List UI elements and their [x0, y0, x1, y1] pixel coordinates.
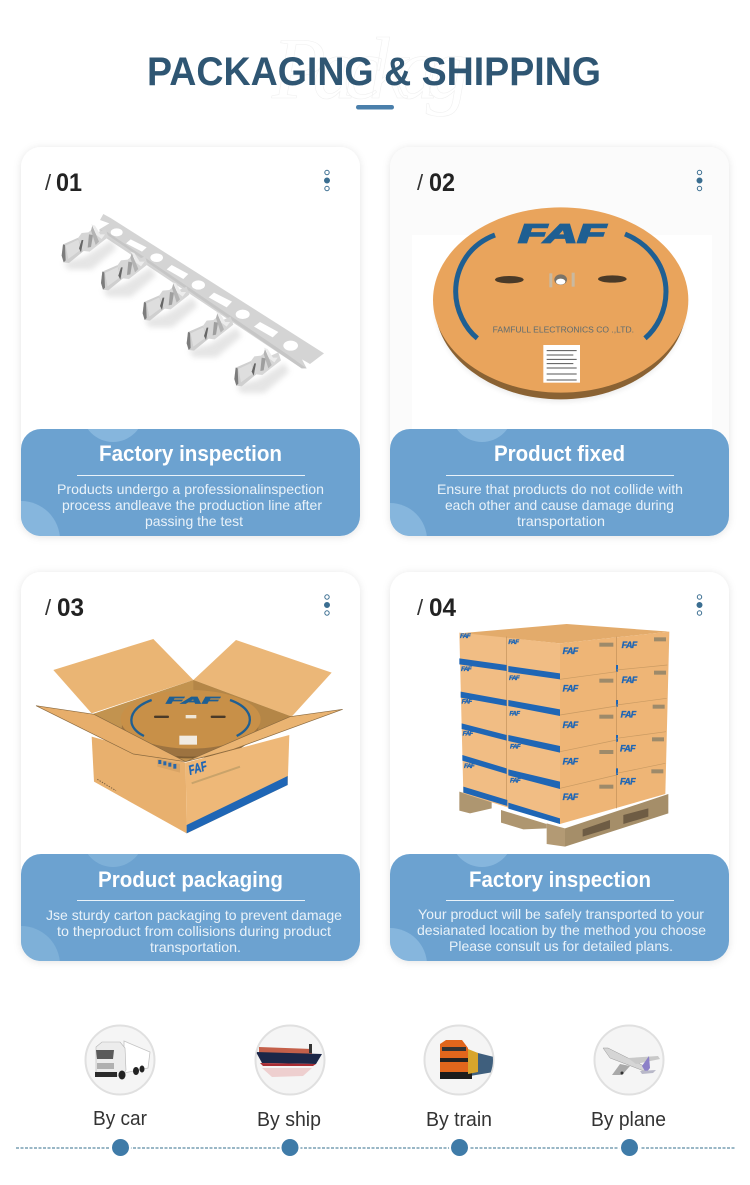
panel: card 02 product fixed — [388, 146, 731, 539]
carton logos: FAF — [563, 646, 579, 656]
caption heading: Factory inspection — [469, 867, 651, 892]
caption text — [417, 906, 706, 954]
menu dots — [324, 595, 330, 615]
icon: ship — [256, 1026, 324, 1094]
panel: card 04 delivery — [388, 571, 731, 964]
label: by plane: By plane — [591, 1109, 666, 1131]
reel logo: FAF — [518, 218, 608, 248]
title underline — [356, 105, 394, 110]
caption panel 02 — [390, 429, 729, 536]
label: by train: By train — [426, 1109, 492, 1131]
carton logos: FAF — [620, 743, 636, 753]
caption text — [57, 481, 324, 529]
carton logos: FAF — [461, 666, 472, 673]
reel company name: FAMFULL ELECTRONICS CO .,LTD. — [493, 326, 634, 335]
caption text: Jse sturdy carton packaging to prevent damage — [46, 907, 342, 923]
script watermark: Packag — [271, 21, 470, 118]
transport methods — [16, 1026, 735, 1157]
caption text: each other and cause damage during — [445, 497, 674, 513]
step number 04 — [417, 594, 456, 622]
carton logos: FAF — [464, 763, 475, 770]
carton logos: FAF — [622, 640, 638, 650]
step number 03: / — [45, 595, 52, 620]
carton logos: FAF — [509, 675, 520, 682]
caption text: Please consult us for detailed plans. — [449, 938, 673, 954]
caption text: transportation — [517, 513, 605, 529]
inner reel logo: FAF — [166, 696, 220, 706]
carton logos: FAF — [510, 744, 521, 751]
carton logos — [460, 633, 638, 802]
carton logos: FAF — [463, 730, 473, 737]
carton logo: FAF — [187, 758, 209, 778]
wooden pallet — [459, 792, 668, 847]
caption panel 03 — [21, 854, 360, 961]
caption heading: Product fixed — [494, 441, 625, 466]
caption text: Products undergo a professionalinspection — [57, 481, 324, 497]
carton logos: FAF — [563, 720, 579, 730]
label: by car: By car — [93, 1108, 147, 1130]
panel: card 01 factory inspection — [19, 146, 362, 539]
header — [147, 21, 601, 118]
caption text: desianated location by the method you choose — [417, 922, 706, 938]
caption text: passing the test — [145, 513, 243, 529]
icon: plane — [594, 1026, 664, 1094]
caption text — [437, 481, 683, 529]
carton logos: FAF — [460, 633, 471, 640]
caption heading: Product packaging — [98, 867, 283, 892]
label: by ship: By ship — [257, 1109, 321, 1131]
carton logos: FAF — [508, 639, 519, 646]
carton logos: FAF — [621, 709, 637, 719]
timeline — [16, 1138, 735, 1157]
caption text: Your product will be safely transported to your — [418, 906, 704, 922]
menu dots — [697, 595, 702, 615]
step number 04: 04 — [429, 594, 456, 622]
step number 03 — [45, 594, 84, 622]
carton logos: FAF — [622, 675, 638, 685]
menu dots — [697, 170, 702, 191]
image: palletised cartons — [459, 624, 669, 847]
step number 02: 02 — [429, 169, 455, 197]
step number 04: / — [417, 595, 424, 620]
carton logos: FAF — [563, 683, 579, 693]
menu dots — [324, 170, 330, 191]
caption text — [46, 907, 342, 955]
step number 02: / — [417, 170, 424, 195]
step number 02 — [417, 169, 455, 197]
carton logos: FAF — [563, 792, 579, 802]
caption text: process andleave the production line after — [62, 497, 322, 513]
carton logos: FAF — [510, 778, 521, 785]
caption panel 04 — [390, 854, 729, 961]
step number 01: 01 — [56, 169, 82, 197]
caption text: Ensure that products do not collide with — [437, 481, 683, 497]
image: metal terminal strip — [62, 214, 324, 393]
carton logos: FAF — [509, 711, 520, 718]
caption panel 01 — [21, 429, 360, 536]
image: cardboard reel — [433, 207, 688, 402]
step number 03: 03 — [57, 594, 84, 622]
carton logos: FAF — [462, 698, 472, 705]
carton logos: FAF — [563, 757, 579, 767]
panel: card 03 product packaging — [19, 571, 362, 964]
caption text: transportation. — [150, 939, 241, 955]
title: PACKAGING & SHIPPING — [147, 50, 601, 94]
icon: truck — [86, 1026, 154, 1094]
step number 01 — [45, 169, 82, 197]
carton logos: FAF — [620, 777, 636, 787]
step number 01: / — [45, 170, 52, 195]
reel label — [543, 345, 580, 383]
caption text: to theproduct from collisions during product — [57, 923, 331, 939]
caption heading: Factory inspection — [99, 441, 282, 466]
icon: train — [424, 1026, 494, 1094]
image: open carton — [36, 639, 343, 833]
